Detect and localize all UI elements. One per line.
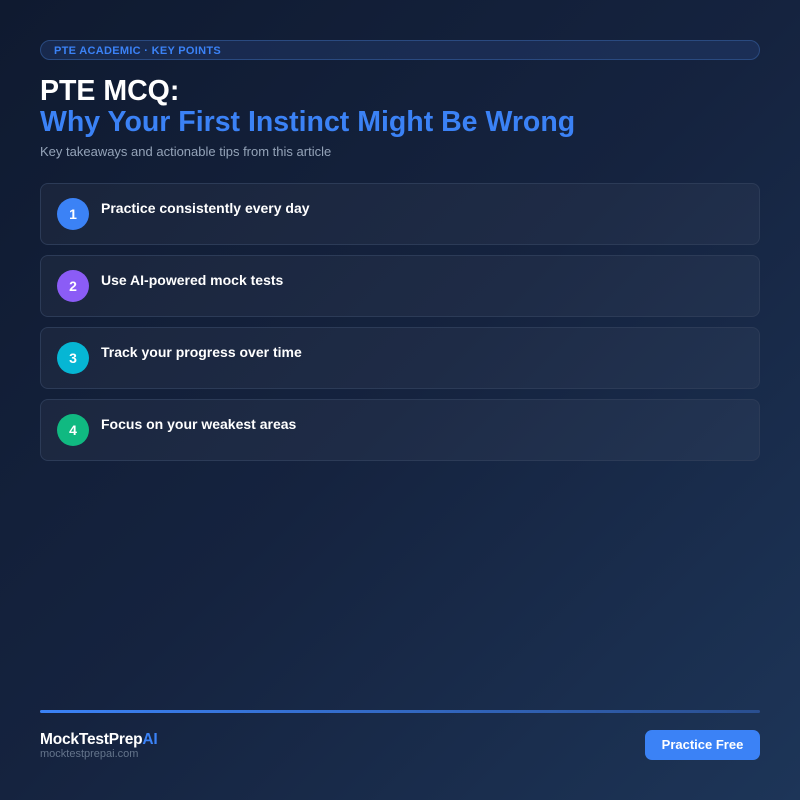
title line 1: PTE MCQ:: [40, 75, 179, 107]
card 4: [40, 399, 760, 461]
card 1: Practice consistently every day: [101, 200, 310, 216]
url: mocktestprepai.com: [40, 748, 138, 760]
card 2: [40, 255, 760, 317]
subtitle: Key takeaways and actionable tips from this article: [40, 144, 331, 159]
card 3: 3: [69, 350, 77, 366]
card 3: [40, 327, 760, 389]
brand: MockTestPrepAI: [40, 731, 158, 748]
card 3: Track your progress over time: [101, 344, 302, 360]
button: [645, 730, 760, 760]
card 2: 2: [69, 278, 77, 294]
badge: [40, 40, 760, 60]
badge: PTE ACADEMIC · KEY POINTS: [54, 45, 221, 57]
card 1: [40, 183, 760, 245]
card 4: Focus on your weakest areas: [101, 416, 296, 432]
title line 2: Why Your First Instinct Might Be Wrong: [40, 106, 575, 138]
button: Practice Free: [662, 737, 743, 752]
card 4: 4: [69, 422, 77, 438]
card 1: 1: [69, 206, 77, 222]
card 2: Use AI-powered mock tests: [101, 272, 283, 288]
